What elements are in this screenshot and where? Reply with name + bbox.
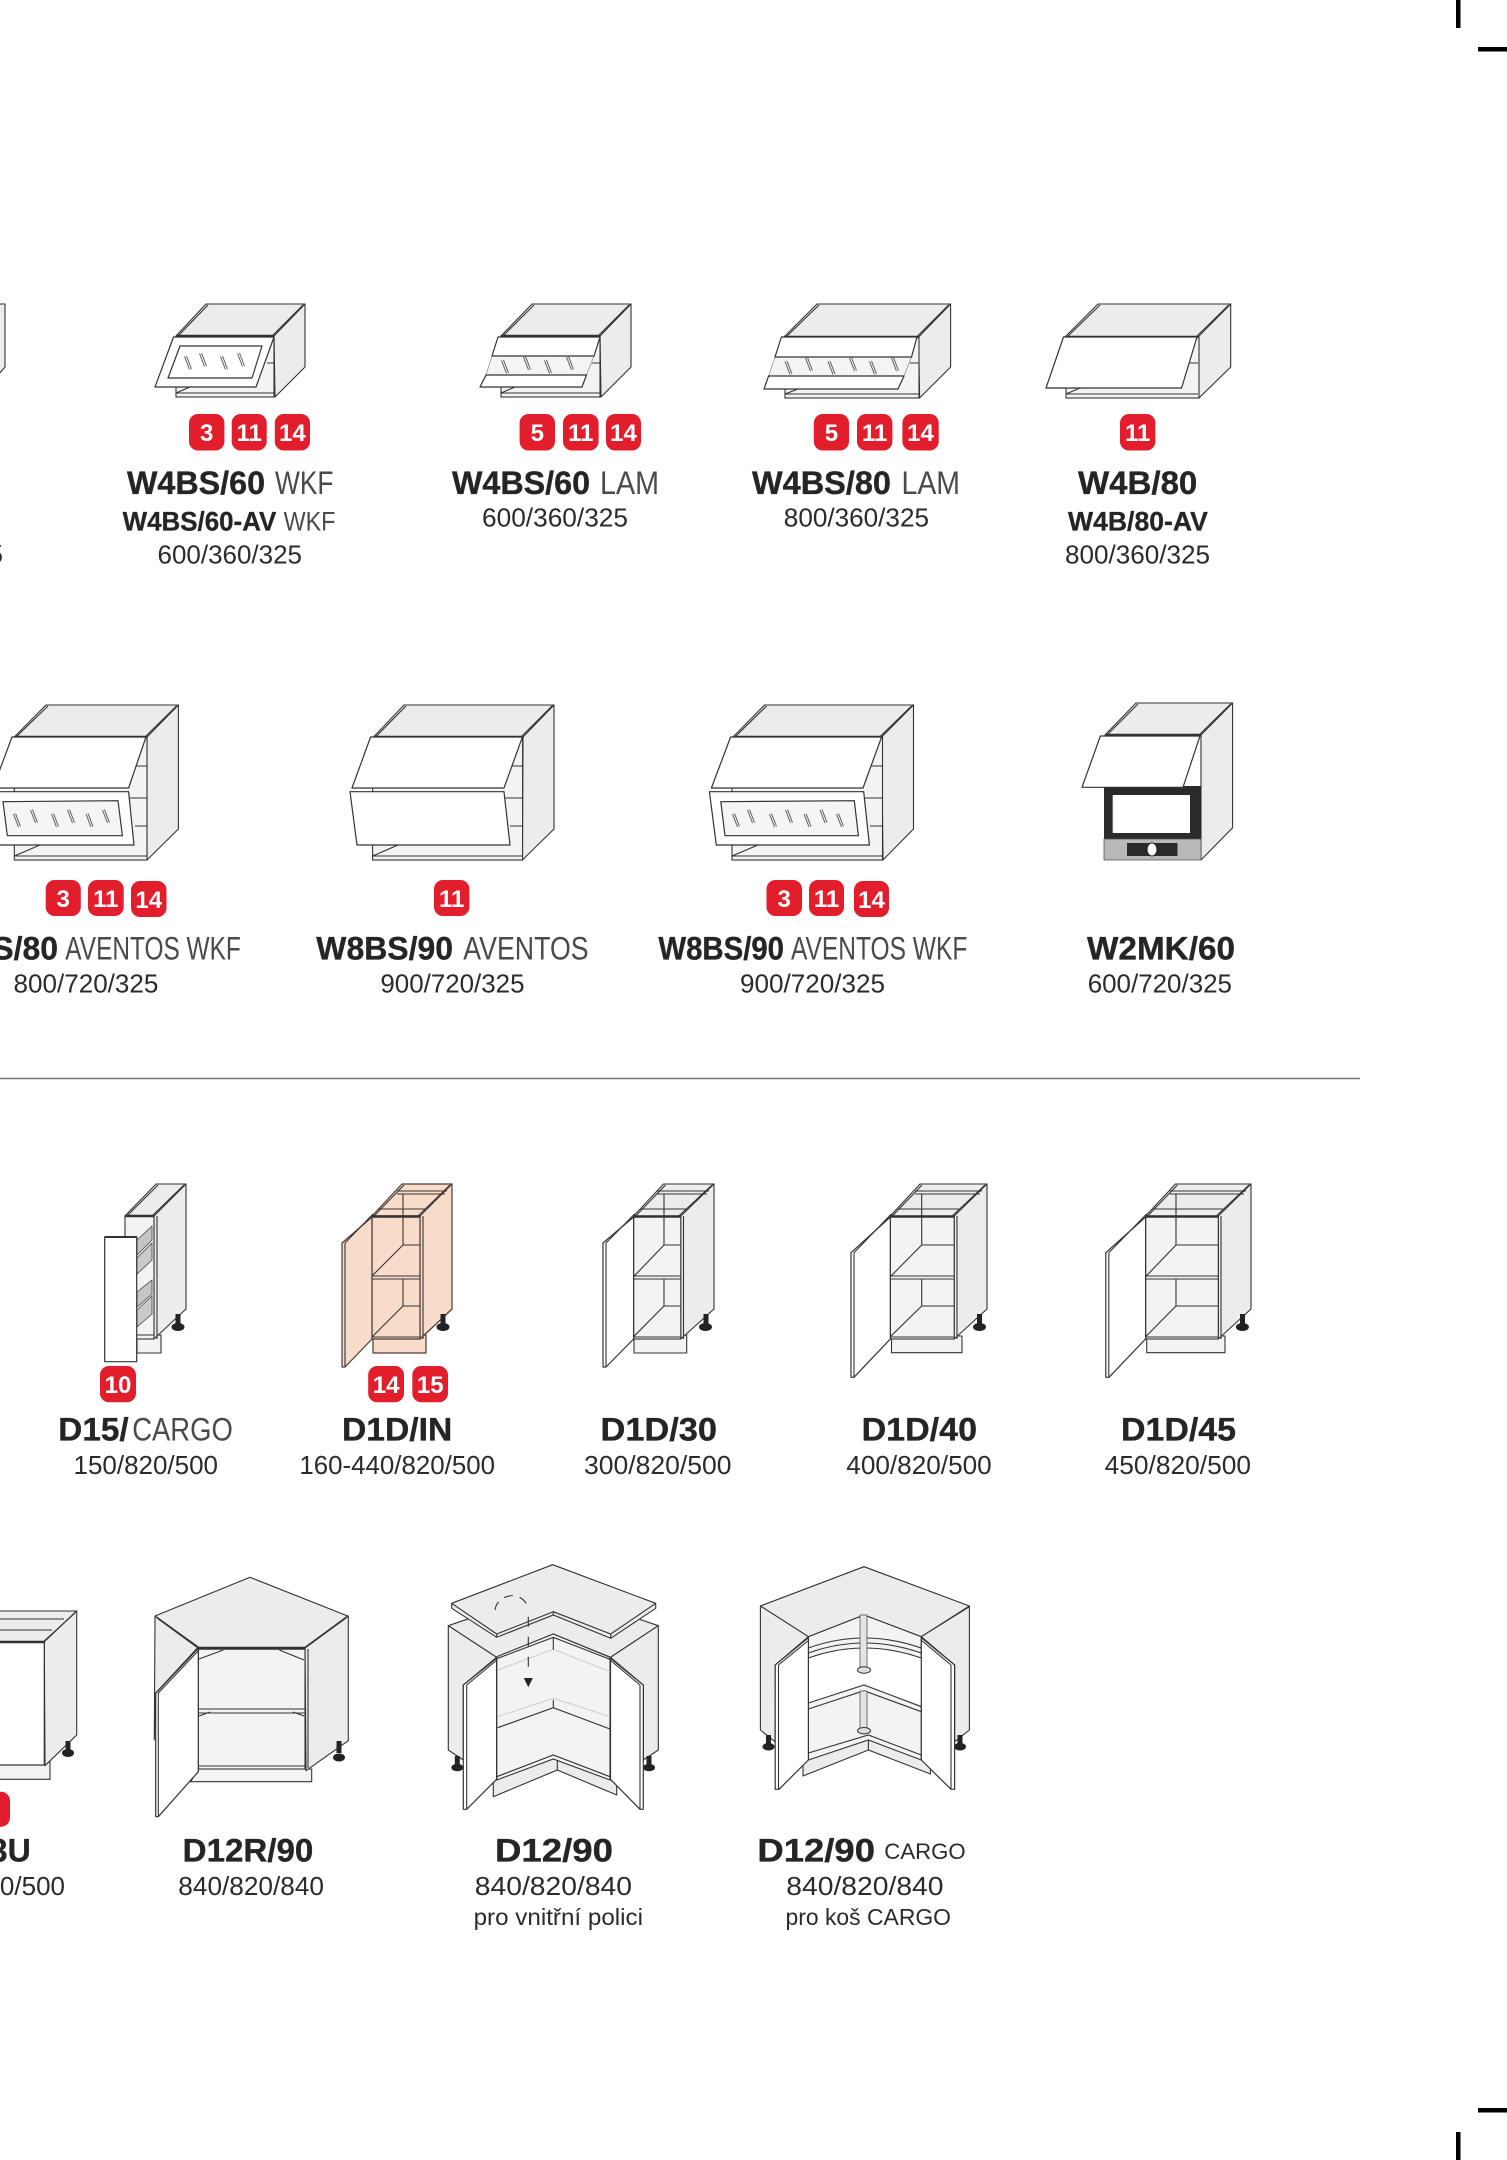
badges 3 11 14	[766, 880, 889, 917]
alternate model name: W4BS/60-AV	[123, 507, 276, 537]
badges 3 11 14: 11	[93, 886, 118, 913]
product: W8BS/90 AVENTOS	[316, 705, 589, 999]
cut-off cabinet fragment, row 1	[0, 304, 5, 569]
model name: D1D/40	[862, 1412, 977, 1448]
partial dimensions: 0/500	[0, 1871, 65, 1901]
badges 5 11 14	[814, 414, 939, 450]
badge 11: 11	[439, 886, 464, 913]
badges 3 11 14: 11	[237, 420, 262, 447]
product: W8BS/90 AVENTOS WKF	[658, 705, 967, 999]
badges 3 11 14	[46, 880, 167, 917]
model name: CARGO	[132, 1412, 233, 1448]
badges 3 11 14: 3	[778, 886, 791, 913]
model name	[757, 1833, 966, 1869]
product: D1D/IN	[299, 1184, 495, 1480]
badge 10: 10	[105, 1372, 131, 1399]
model name: W4BS/80	[752, 465, 891, 501]
dimensions: 900/720/325	[740, 969, 885, 999]
model name: WKF	[275, 465, 334, 501]
salmon-coloured base cabinet	[342, 1184, 452, 1367]
badges 14 15	[368, 1366, 448, 1402]
L-shaped corner cabinet with inner shelf	[448, 1565, 658, 1809]
cabinet drawing with plain flap	[1046, 304, 1231, 398]
badges 3 11 14: 3	[57, 886, 70, 913]
model name: D12/90	[757, 1833, 875, 1869]
model name	[316, 930, 589, 966]
base cabinet with open door	[1106, 1184, 1251, 1377]
model name: CARGO	[884, 1839, 966, 1864]
badge 10	[100, 1366, 136, 1402]
badges 3 11 14: 3	[200, 420, 213, 447]
model name: LAM	[902, 465, 960, 501]
dimensions: 840/820/840	[475, 1871, 632, 1901]
model name	[0, 930, 241, 966]
badges 5 11 14: 5	[825, 420, 838, 447]
badges 5 11 14	[520, 414, 641, 450]
model name: D1D/IN	[342, 1412, 452, 1448]
model name: D12R/90	[183, 1833, 313, 1869]
alternate model name: W4B/80-AV	[1068, 507, 1208, 537]
dimensions: 600/360/325	[158, 539, 302, 569]
base cabinet with pull-out cargo	[105, 1184, 186, 1362]
usage note: pro vnitřní polici	[474, 1904, 643, 1930]
model name: D15/	[58, 1412, 129, 1448]
L-shaped corner cabinet with carousel	[760, 1567, 969, 1789]
product: W4BS/60 LAM	[452, 304, 659, 533]
tall cabinet drawing with glass flap	[0, 705, 178, 860]
model name: AVENTOS	[463, 930, 589, 966]
model name: D12/90	[495, 1833, 613, 1869]
model name: LAM	[600, 465, 659, 501]
diagonal corner cabinet	[154, 1577, 348, 1817]
product: D1D/40	[846, 1184, 992, 1480]
dimensions: 840/820/840	[178, 1871, 324, 1901]
model name: D1D/30	[600, 1412, 717, 1448]
dimensions: 900/720/325	[380, 969, 524, 999]
tall cabinet drawing with glass flap	[709, 705, 914, 860]
product: D1D/30	[584, 1184, 732, 1480]
tall cabinet drawing with plain flaps	[350, 705, 554, 860]
badge 11	[434, 880, 469, 916]
alternate model name: WKF	[284, 507, 335, 537]
model name	[452, 465, 659, 501]
dimensions: 300/820/500	[584, 1450, 732, 1480]
badges 5 11 14: 11	[568, 420, 593, 447]
cabinet drawing with lamella flap	[764, 304, 951, 398]
product: W4BS/80 LAM	[752, 304, 960, 533]
badges 3 11 14: 14	[279, 420, 306, 447]
floating shelf plate	[452, 1565, 656, 1638]
product: W4BS/60 WKF	[123, 304, 335, 569]
dimensions: 450/820/500	[1105, 1450, 1251, 1480]
dimensions: 150/820/500	[74, 1450, 218, 1480]
model name: AVENTOS WKF	[791, 930, 967, 966]
dimensions: 800/360/325	[784, 503, 929, 533]
model name	[658, 930, 967, 966]
dimensions: 840/820/840	[786, 1871, 944, 1901]
dimensions: 160-440/820/500	[299, 1450, 495, 1480]
product: W8BS/80 AVENTOS WKF	[0, 705, 241, 999]
partial base cabinet	[0, 1611, 77, 1779]
badges 5 11 14: 5	[531, 420, 544, 447]
model name: W4BS/60	[452, 465, 590, 501]
model name: W4BS/60	[127, 465, 265, 501]
model name: W2MK/60	[1087, 930, 1235, 966]
badge 11	[1120, 414, 1155, 450]
dimensions: 800/360/325	[1065, 539, 1210, 569]
product: W4B/80	[1046, 304, 1231, 569]
badges 5 11 14: 14	[907, 420, 934, 447]
badges 3 11 14: 11	[814, 886, 839, 913]
model name: AVENTOS WKF	[65, 930, 241, 966]
model name: W8BS/90	[658, 930, 784, 966]
base cabinet with open door	[851, 1184, 987, 1377]
product: D12R/90	[154, 1577, 348, 1901]
model name: W8BS/90	[316, 930, 453, 966]
section divider	[0, 1078, 1360, 1080]
model name: D1D/45	[1121, 1412, 1236, 1448]
badges 14 15: 15	[417, 1372, 444, 1399]
product: D12/90 CARGO	[757, 1567, 969, 1930]
product: D15/CARGO	[58, 1184, 233, 1480]
cabinet drawing with built-in oven	[1082, 703, 1233, 860]
badges 3 11 14	[189, 414, 310, 450]
product: D12/90	[448, 1565, 658, 1930]
model name	[752, 465, 960, 501]
badges 5 11 14: 14	[610, 420, 637, 447]
model name: W4B/80	[1078, 465, 1197, 501]
badges 5 11 14: 11	[862, 420, 887, 447]
dimensions: 400/820/500	[846, 1450, 992, 1480]
dimensions: 800/720/325	[14, 969, 158, 999]
cabinet drawing with lamella flap	[480, 304, 631, 397]
badges 3 11 14: 14	[858, 887, 885, 914]
usage note: pro koš CARGO	[786, 1904, 951, 1930]
cabinet drawing with glass flap	[155, 304, 305, 397]
cut-off product at left edge, row 4	[0, 1611, 77, 1901]
dashed insertion arrow	[495, 1596, 533, 1687]
dimensions: 600/360/325	[482, 503, 628, 533]
badges 3 11 14: 14	[135, 887, 163, 914]
crop marks	[1456, 0, 1507, 2160]
partial badge	[0, 1792, 10, 1827]
model name	[127, 465, 334, 501]
badge 11: 11	[1125, 420, 1150, 447]
dimensions: 600/720/325	[1088, 969, 1232, 999]
product: W2MK/60	[1082, 703, 1235, 999]
product: D1D/45	[1105, 1184, 1251, 1480]
base cabinet with open door	[603, 1184, 714, 1367]
badges 14 15: 14	[373, 1372, 400, 1399]
model name	[58, 1412, 233, 1448]
